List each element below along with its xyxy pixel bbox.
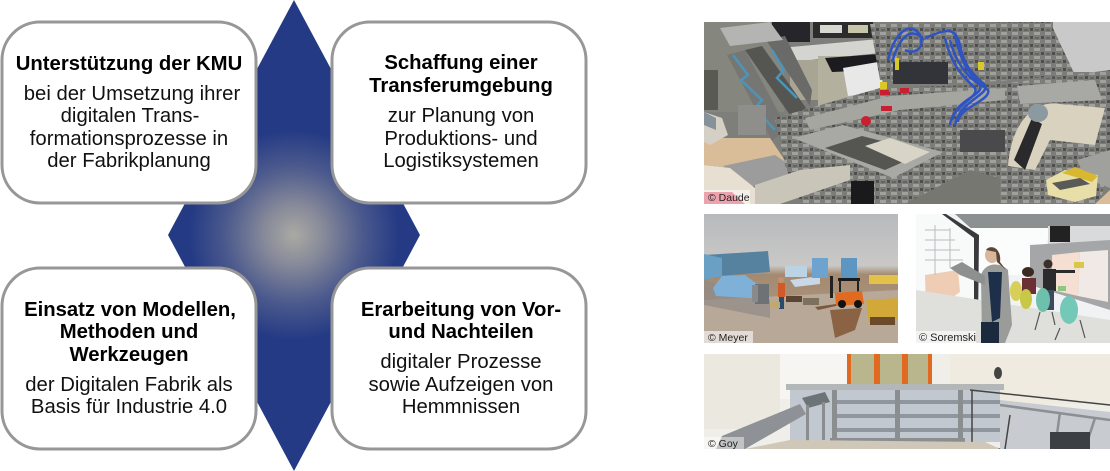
- text: Digitale Fabrik: der Digitalen Fabrik als: [25, 374, 233, 396]
- photo: panoramic assembly line: [704, 354, 1110, 450]
- text: Umsetzung: bei der Umsetzung ihrer: [24, 83, 240, 105]
- photo: Lego factory model: [704, 22, 1110, 204]
- text: Planung: Produktions- und: [384, 128, 538, 150]
- caption: Goy: © Goy: [708, 438, 739, 450]
- caption: Daude: © Daude: [708, 192, 750, 204]
- text: Planung: zur Planung von: [388, 105, 534, 127]
- photo: woman at interactive wall: [916, 214, 1110, 344]
- panel: Erarbeitung von Vor- und Nachteilen: [332, 268, 586, 449]
- diamond background: [168, 0, 420, 471]
- caption: Soremski: © Soremski: [919, 332, 976, 344]
- heading: Unterstützung der KMU: Unterstützung der KMU: [16, 53, 242, 75]
- heading: Erarbeitung: und Nachteilen: [388, 321, 534, 343]
- text: digitale Prozesse: digitaler Prozesse: [380, 351, 542, 373]
- heading: Einsatz von Modellen: Methoden und: [60, 321, 198, 343]
- chairs: [1022, 278, 1036, 294]
- yellow controller: [1046, 170, 1098, 202]
- panel: Einsatz von Modellen: [2, 268, 256, 449]
- person: presenter: [1043, 269, 1056, 291]
- heading: Schaffung einer Transferumgebung: Schaffung einer: [384, 52, 538, 74]
- person: woman: [981, 265, 1012, 343]
- caption: Meyer: © Meyer: [708, 332, 748, 344]
- machine body: [775, 70, 1110, 204]
- heading: Einsatz von Modellen: Einsatz von Modellen,: [24, 299, 236, 321]
- text: digitale Prozesse: Hemmnissen: [402, 396, 520, 418]
- text: Umsetzung: formationsprozesse in: [30, 128, 228, 150]
- ramps: [727, 50, 780, 140]
- heading: Einsatz von Modellen: Werkzeugen: [69, 344, 189, 366]
- heading: Schaffung einer Transferumgebung: Transferumgebung: [369, 75, 553, 97]
- white dome: [1008, 103, 1105, 170]
- text: Digitale Fabrik: Basis für Industrie 4.0: [31, 396, 227, 418]
- text: digitale Prozesse: sowie Aufzeigen von: [369, 374, 553, 396]
- blue cables: [888, 28, 988, 125]
- panel: Schaffung einer Transferumgebung: [332, 22, 586, 203]
- forklift: [830, 276, 833, 298]
- text: Umsetzung: der Fabrikplanung: [47, 150, 211, 172]
- caption: Goy: [704, 437, 744, 450]
- photo: miniature factory with forklift: [704, 214, 898, 344]
- heading: Erarbeitung: Erarbeitung von Vor-: [361, 299, 561, 321]
- text: Umsetzung: digitalen Trans-: [61, 105, 199, 127]
- text: Planung: Logistiksystemen: [383, 150, 539, 172]
- panel: Unterstützung der KMU: [2, 22, 256, 203]
